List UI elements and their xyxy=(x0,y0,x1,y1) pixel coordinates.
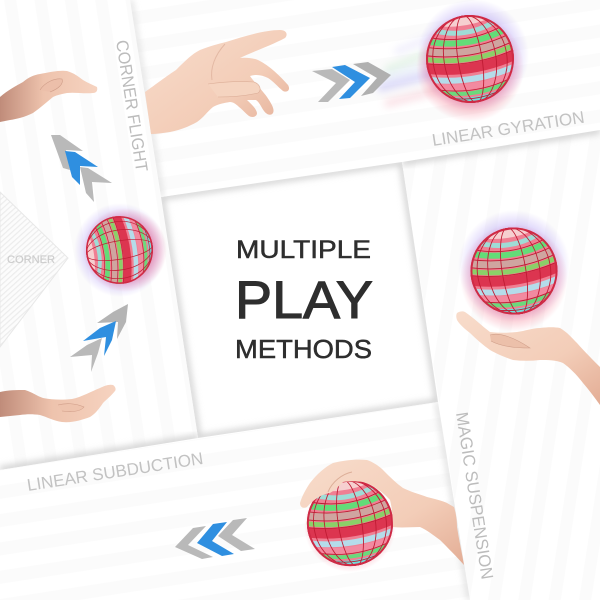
label: linear subduction: LINEAR SUBDUCTION xyxy=(26,449,205,495)
sphere: top linear gyration xyxy=(378,0,529,122)
panel: magic suspension xyxy=(402,130,600,168)
arrow: top right-pointing xyxy=(312,62,391,102)
panel: corner diamond xyxy=(0,192,68,347)
corner label: CORNER xyxy=(7,254,55,266)
label: linear gyration: LINEAR GYRATION xyxy=(431,108,586,150)
sphere: left corner flight xyxy=(74,203,167,297)
label: magic suspension: MAGIC SUSPENSION xyxy=(452,411,497,581)
label: corner flight: CORNER FLIGHT xyxy=(112,39,151,173)
hand: bottom holding sphere xyxy=(300,460,464,565)
arrow: left upper pointing up-left xyxy=(51,135,112,202)
hand: bottom left xyxy=(0,385,116,422)
panel: corner flight xyxy=(0,432,198,470)
title line: multiple: MULTIPLE xyxy=(236,236,371,264)
hand: top left xyxy=(0,71,97,122)
title line: play: PLAY xyxy=(235,271,373,330)
title xyxy=(235,236,373,364)
sphere: bottom held in hand xyxy=(297,473,403,573)
panel: linear subduction xyxy=(434,402,470,600)
arrow: left lower pointing up-right xyxy=(70,304,128,372)
hand: right xyxy=(456,311,600,405)
title line: methods: METHODS xyxy=(235,334,372,364)
panel: center xyxy=(161,162,438,438)
hand: top center reaching xyxy=(145,30,289,134)
arrow: bottom left-pointing xyxy=(175,518,255,559)
sphere: right magic suspension xyxy=(458,210,570,332)
motion trail xyxy=(378,36,440,104)
panel: linear gyration xyxy=(130,0,166,196)
